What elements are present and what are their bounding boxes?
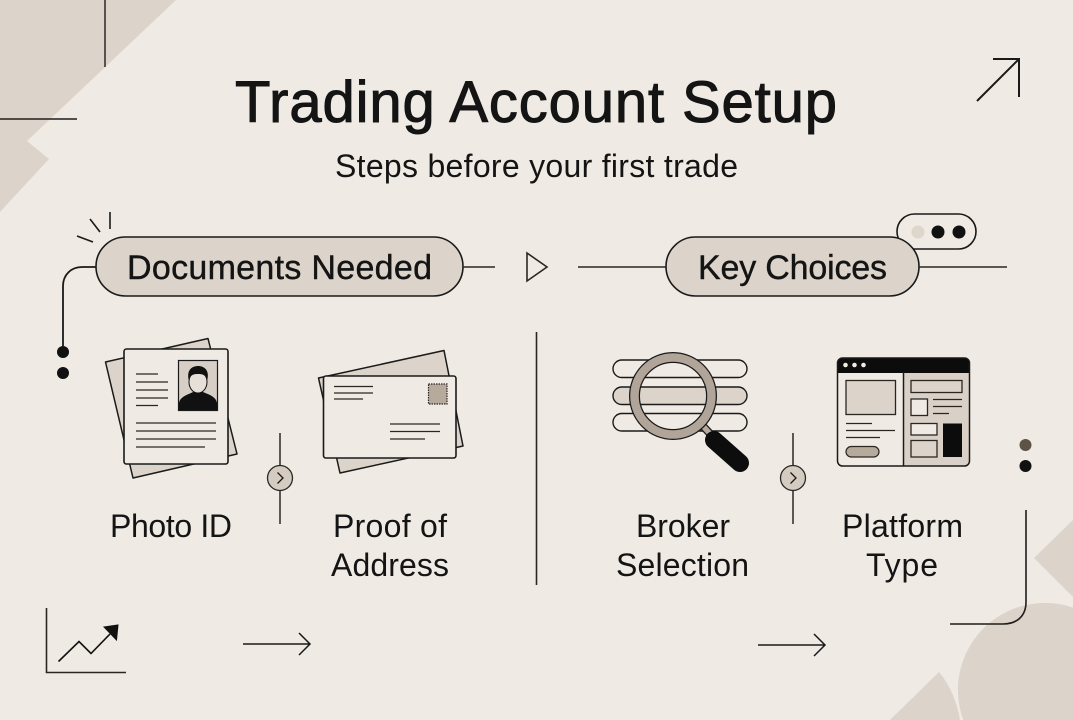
label: Platform Type (842, 508, 963, 583)
icon: growth chart (46, 608, 126, 672)
label: Proof of Address: Proof of (333, 508, 447, 544)
label: Broker Selection: Selection (616, 547, 749, 583)
label: Broker Selection (616, 508, 749, 583)
flow connector with triangle (463, 253, 666, 281)
label: Platform Type: Platform (842, 508, 963, 544)
icon: envelope (318, 350, 463, 473)
title: Trading Account Setup (235, 70, 837, 135)
label: Proof of Address (331, 508, 449, 583)
label: Photo ID: Photo ID (110, 508, 232, 544)
heading: Documents Needed: Documents Needed (127, 249, 432, 287)
heading: Key Choices: Key Choices (698, 249, 887, 287)
step connector: documents (268, 433, 292, 524)
icon: sparks (77, 212, 110, 242)
corner bracket bottom right (950, 510, 1026, 624)
heading: Documents Needed (96, 237, 463, 296)
label: Proof of Address: Address (331, 547, 449, 583)
label: Broker Selection: Broker (636, 508, 730, 544)
arrow: left bottom (243, 633, 310, 655)
icon: trading platform window (838, 358, 970, 466)
connector line right of Key Choices (919, 266, 1007, 268)
subtitle: Steps before your first trade (335, 148, 738, 184)
icon: photo ID (106, 338, 237, 478)
bottom-right background shapes (890, 520, 1073, 720)
arrow: right bottom (758, 634, 825, 656)
status pill with dots (897, 214, 976, 249)
connector: left bracket with dots (57, 267, 96, 379)
top-left background shape (0, 0, 176, 212)
step connector: choices (780, 433, 806, 524)
decorative dots right (1020, 439, 1032, 472)
label: Platform Type: Type (866, 547, 938, 583)
icon: magnifying glass over broker list (613, 358, 747, 463)
icon: diagonal arrow (977, 59, 1019, 101)
heading: Key Choices (666, 237, 919, 296)
central vertical divider (536, 332, 538, 585)
